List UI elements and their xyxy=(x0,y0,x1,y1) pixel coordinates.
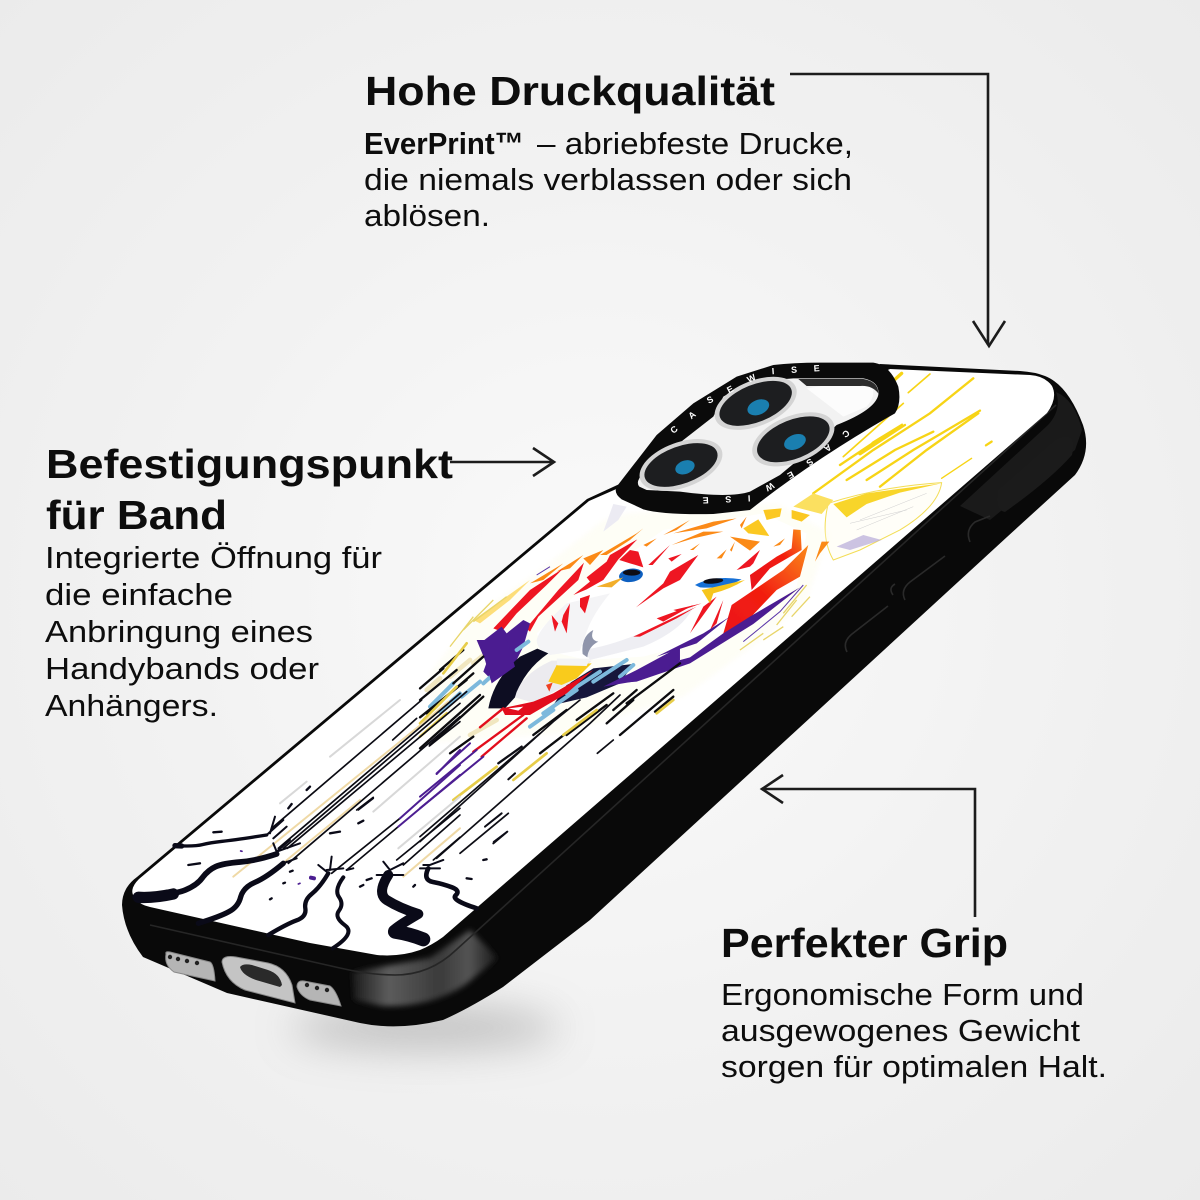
grip bump xyxy=(997,436,1073,512)
eyes xyxy=(597,567,745,603)
black lower streaks xyxy=(420,650,680,753)
speaker grille left xyxy=(166,952,215,981)
text block: print quality: – abriebfeste Drucke, xyxy=(537,126,853,161)
corner sheen xyxy=(352,930,498,1006)
rim line xyxy=(150,405,1056,975)
text block: band attachment: die einfache xyxy=(45,577,233,612)
purple drips xyxy=(420,743,483,808)
red-orange right streaks xyxy=(690,545,808,660)
artwork: animal head xyxy=(430,503,830,743)
fur halo xyxy=(430,503,830,743)
heading: band attachment: für Band xyxy=(46,492,227,538)
text block: grip xyxy=(721,977,1107,1084)
muzzle shading xyxy=(537,593,610,655)
yellow patches xyxy=(473,508,810,623)
purple blob xyxy=(477,640,515,683)
pale cream streaks xyxy=(427,650,668,735)
pale blue streaks xyxy=(430,642,633,727)
arrow: grip xyxy=(762,775,975,917)
white printed back xyxy=(132,369,1054,955)
yellow drips xyxy=(420,643,673,800)
ring lettering lower: CASEWISE xyxy=(702,430,850,504)
artwork: long drips xyxy=(233,692,467,877)
arrow: print quality xyxy=(790,74,1005,346)
heading: band attachment: Befestigungspunkt xyxy=(46,441,453,487)
heading: print quality: Hohe Druckqualität xyxy=(365,68,775,114)
lens left xyxy=(633,429,729,501)
far ear xyxy=(603,504,627,532)
text block: band attachment xyxy=(45,540,382,723)
text block: print quality: ablösen. xyxy=(364,198,490,233)
text block: grip: sorgen für optimalen Halt. xyxy=(721,1049,1107,1084)
mouth dark band xyxy=(488,649,548,708)
orange streaks xyxy=(530,517,829,583)
charging port xyxy=(222,957,295,1003)
red streaks xyxy=(493,539,760,637)
lens right xyxy=(744,401,842,477)
camera module xyxy=(616,362,900,514)
text block: band attachment: Anhängers. xyxy=(45,688,218,723)
purple drips xyxy=(398,750,460,827)
mane dark right of tongue xyxy=(553,664,633,705)
case body xyxy=(122,364,1086,1026)
camera ring xyxy=(616,363,899,514)
phone case xyxy=(122,362,1086,1026)
ink streams xyxy=(175,835,267,846)
text block: band attachment: Anbringung eines xyxy=(45,614,313,649)
text block: band attachment: Integrierte Öffnung für xyxy=(45,540,382,575)
text block: grip: ausgewogenes Gewicht xyxy=(721,1013,1080,1048)
text block: grip: Ergonomische Form und xyxy=(721,977,1084,1012)
artwork: mouth and lower streaks xyxy=(420,640,680,858)
fine fur strokes xyxy=(450,585,810,650)
splash bursts xyxy=(267,817,443,875)
text block: print quality xyxy=(364,126,853,233)
tongue xyxy=(515,661,592,703)
ring lettering: CASEWISE xyxy=(670,365,820,433)
text block: band attachment: Handybands oder xyxy=(45,651,319,686)
tooth yellow xyxy=(548,663,592,685)
black drips xyxy=(272,692,467,873)
lens top xyxy=(707,366,804,441)
ink droplets xyxy=(188,787,487,899)
arrow: band attachment xyxy=(450,448,554,476)
speaker grille right xyxy=(297,981,341,1006)
text block: print quality: die niemals verblassen oder sich xyxy=(364,162,852,197)
lower lip and red drips xyxy=(502,670,593,715)
long black drips xyxy=(420,695,620,858)
heading: band attachment xyxy=(46,441,453,538)
clear window xyxy=(638,378,878,495)
artwork: ear xyxy=(793,483,942,560)
artwork: ink splashes and streams xyxy=(135,787,507,948)
faint grey drips xyxy=(280,700,460,848)
side buttons xyxy=(845,516,990,652)
face xyxy=(537,513,807,660)
side highlight xyxy=(960,392,1082,520)
heading: grip: Perfekter Grip xyxy=(721,920,1008,966)
text block: print quality: EverPrint™ xyxy=(364,126,524,161)
artwork: yellow drips xyxy=(813,373,992,493)
cream and yellow drips xyxy=(233,702,460,877)
phone drop shadow xyxy=(290,1006,560,1050)
purple fur xyxy=(480,587,800,684)
